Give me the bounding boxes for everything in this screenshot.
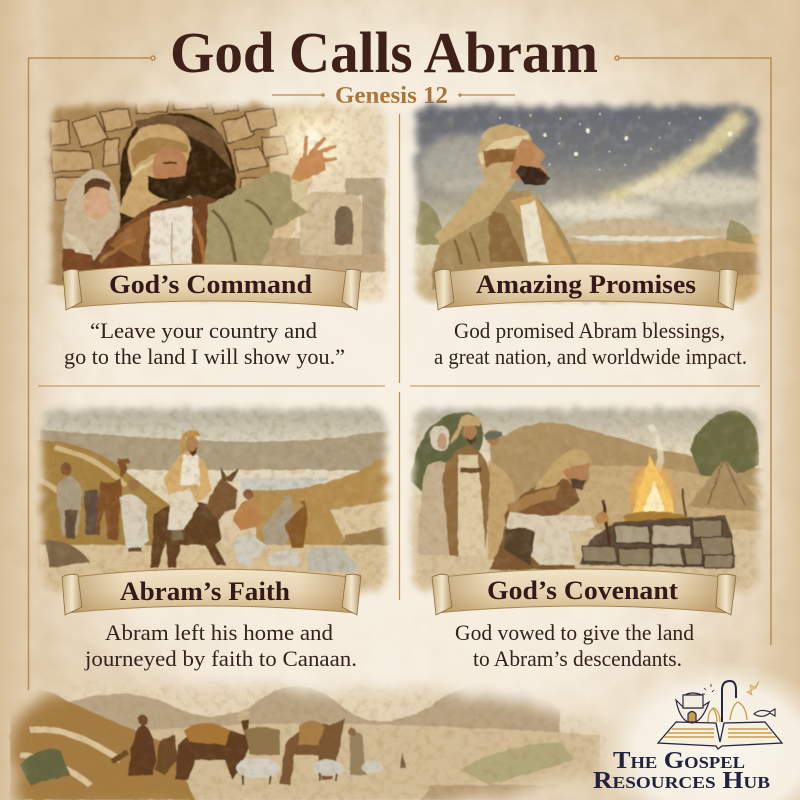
body text: God's Covenant: to Abram’s descendants. <box>473 646 682 671</box>
banner: Amazing Promises: Amazing Promises <box>476 270 696 299</box>
altar <box>580 515 735 568</box>
subtitle: Genesis 12 <box>335 83 448 109</box>
icon: shepherd staff <box>722 681 736 722</box>
logo: The Gospel Resources Hub <box>593 681 782 794</box>
bottom caravan scene <box>8 676 612 800</box>
body text: God's Command: go to the land I will show you.” <box>64 344 345 369</box>
kneeling Abram <box>490 450 610 570</box>
icon: fish <box>754 709 775 716</box>
body text: Abram's Faith: journeyed by faith to Canaan. <box>84 646 357 671</box>
panel: Amazing Promises <box>405 95 770 369</box>
illustration: Abram building an altar <box>406 402 765 596</box>
banner: God's Covenant <box>432 569 736 615</box>
body text: Amazing Promises: God promised Abram blessings, <box>454 318 725 343</box>
logo wordmark <box>593 748 770 794</box>
body text: Amazing Promises: a great nation, and worldwide impact. <box>434 344 747 369</box>
body text: Amazing Promises <box>434 318 747 369</box>
icon: open book <box>658 722 782 749</box>
body text: God's Command <box>64 318 345 369</box>
illustration: Abram riding a donkey with his caravan <box>30 400 395 610</box>
body text: Abram's Faith: Abram left his home and <box>105 620 333 645</box>
rider and donkey <box>150 430 240 568</box>
banner: God's Command <box>63 264 361 310</box>
subtitle <box>272 83 515 109</box>
title: God Calls Abram <box>170 20 598 85</box>
panel: Abram's Faith <box>30 400 395 671</box>
head <box>118 124 192 218</box>
banner: Abram's Faith <box>62 569 361 615</box>
robe <box>432 190 580 290</box>
logo wordmark: Resources Hub <box>593 768 770 794</box>
icon: ark <box>676 693 709 723</box>
logo wordmark: The Gospel <box>613 748 745 774</box>
three onlookers <box>418 414 515 560</box>
turban <box>435 124 532 245</box>
panel: God's Covenant <box>400 400 770 671</box>
caravan figures, camels and sheep <box>112 710 406 785</box>
decorative frame <box>28 56 771 690</box>
right people, camels and sheep <box>232 489 358 572</box>
body text: Abram's Faith <box>84 620 357 671</box>
banner: Abram's Faith: Abram’s Faith <box>120 577 291 606</box>
body text: God's Covenant: God vowed to give the land <box>455 620 694 645</box>
body text: God's Covenant <box>455 620 694 671</box>
robe <box>90 194 261 270</box>
icon: dove <box>747 681 759 695</box>
left people and camels <box>56 458 148 552</box>
illustration: Abram beneath the stars <box>405 95 770 305</box>
banner: Amazing Promises <box>434 264 738 310</box>
illustration: Abram pointing beside wall and ruins <box>40 94 390 305</box>
banner: God's Command: God’s Command <box>109 270 313 299</box>
woman <box>62 168 122 261</box>
icon: figures <box>708 702 747 722</box>
fire and smoke <box>622 425 688 531</box>
body text: God's Command: “Leave your country and <box>90 318 317 343</box>
panel: God's Command <box>40 94 390 369</box>
banner: God's Covenant: God’s Covenant <box>487 576 678 605</box>
icon: rays <box>702 684 714 694</box>
